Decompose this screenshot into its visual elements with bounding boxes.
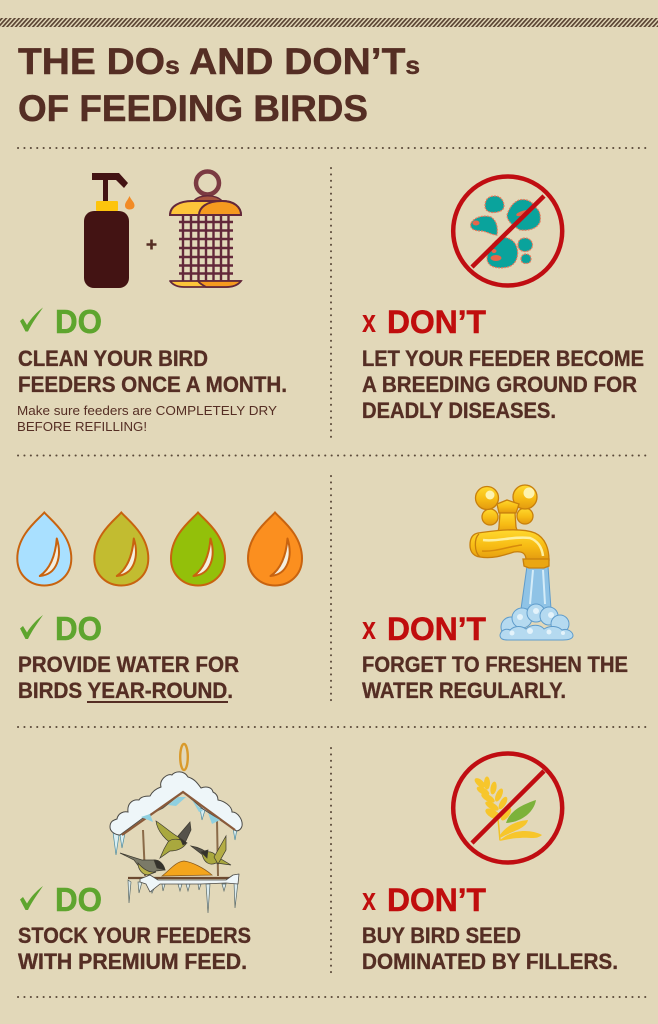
title: OF FEEDING BIRDS — [18, 88, 368, 129]
do label — [20, 881, 102, 918]
text block: PROVIDE WATER FOR — [18, 652, 239, 677]
text block: DEADLY DISEASES. — [362, 398, 556, 423]
text block: Make sure feeders are COMPLETELY DRY — [17, 403, 277, 418]
panel: do provide water — [17, 512, 302, 703]
text block: FEEDERS ONCE A MONTH. — [18, 372, 287, 397]
dont label: x — [362, 610, 376, 646]
text block: A BREEDING GROUND FOR — [362, 372, 637, 397]
dont label: DON’T — [387, 882, 486, 918]
text block — [362, 923, 618, 974]
title: THE DO s AND DON’T s — [18, 41, 420, 82]
dont label: x — [362, 303, 376, 339]
dont label: DON’T — [387, 611, 486, 647]
handles — [470, 485, 549, 568]
tray icicles — [128, 880, 238, 913]
text block — [18, 923, 251, 974]
dont label: x — [362, 881, 376, 917]
dont label: DON’T — [387, 304, 486, 340]
text block: BUY BIRD SEED — [362, 923, 521, 948]
text block — [362, 652, 628, 703]
text block: CLEAN YOUR BIRD — [18, 346, 208, 371]
bird 1 — [120, 853, 165, 875]
water stream — [521, 566, 551, 609]
text block: BIRDS YEAR-ROUND. — [18, 678, 233, 703]
panel: do premium feed — [18, 744, 251, 974]
icon: no wheat — [453, 754, 562, 862]
panel: dont forget water — [362, 485, 628, 703]
do label: DO — [55, 881, 102, 918]
icon: golden faucet — [470, 485, 573, 640]
panel: dont fillers — [362, 754, 618, 974]
snow roof — [110, 772, 242, 835]
icicles under roof — [113, 808, 237, 855]
feed pile — [162, 861, 212, 876]
do label: DO — [55, 610, 102, 647]
title — [18, 41, 420, 129]
plus sign — [146, 240, 156, 250]
panel: do clean feeders — [17, 172, 287, 434]
icon: snowy bird feeder with birds — [110, 744, 242, 913]
foam — [500, 604, 573, 640]
text block: BEFORE REFILLING! — [17, 419, 147, 434]
text block — [362, 346, 644, 423]
do label — [20, 303, 102, 340]
do label: DO — [55, 303, 102, 340]
icon: bird feeder cage — [170, 172, 241, 287]
text block: STOCK YOUR FEEDERS — [18, 923, 251, 948]
panel: dont breeding ground — [362, 176, 644, 423]
text block: WATER REGULARLY. — [362, 678, 566, 703]
text block — [18, 652, 239, 703]
icon: no germs — [453, 176, 562, 286]
text block — [17, 346, 287, 434]
icon: soap bottle — [84, 173, 134, 288]
text block: WITH PREMIUM FEED. — [18, 949, 247, 974]
bird 2 — [156, 821, 191, 858]
tray — [128, 877, 230, 879]
icon: water drops — [17, 512, 302, 586]
bird 3 — [191, 836, 231, 865]
text block: DOMINATED BY FILLERS. — [362, 949, 618, 974]
do label — [20, 610, 102, 647]
text block: FORGET TO FRESHEN THE — [362, 652, 628, 677]
